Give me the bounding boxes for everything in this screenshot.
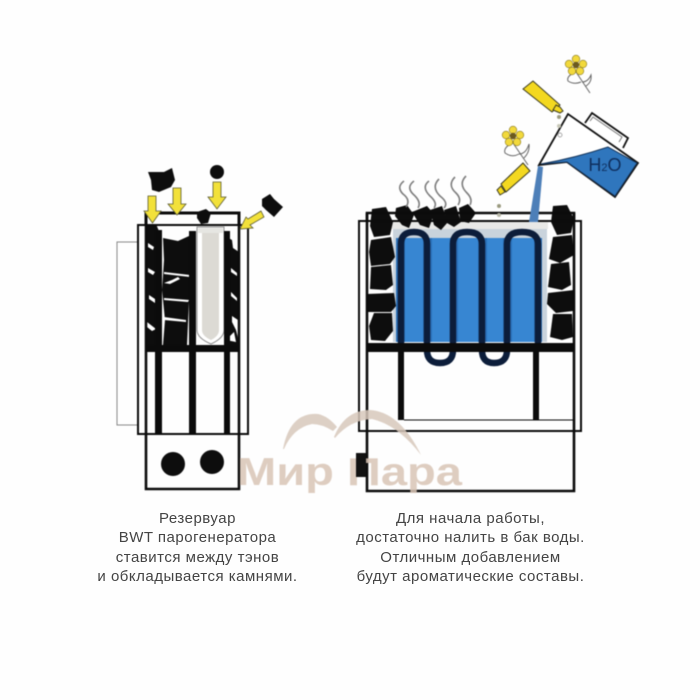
steam	[400, 176, 471, 208]
watermark: Мир Пара: Мир Пара	[237, 451, 462, 494]
water stream	[529, 166, 543, 222]
right heater side tab	[356, 453, 366, 477]
yellow arrows	[144, 182, 264, 229]
left heater posts and bar	[146, 230, 239, 434]
left heater grey side panel	[117, 242, 137, 425]
right heater housing	[359, 213, 581, 491]
kettle handle	[585, 113, 628, 148]
water tank	[390, 222, 548, 342]
left heater rocks	[147, 224, 239, 345]
right heater bar and posts	[367, 343, 574, 420]
right heater rocks	[367, 204, 574, 341]
lower flower	[502, 126, 529, 165]
heating coil	[401, 232, 538, 363]
lower aroma bottle	[497, 163, 530, 217]
watermark: Мир Пара	[237, 410, 462, 494]
kettle with water	[539, 113, 638, 197]
left heater: steam generator reservoir between heating elements	[117, 165, 283, 489]
left caption: BWT парогенератора	[119, 529, 276, 546]
left caption: и обкладывается камнями.	[97, 568, 298, 585]
right caption: Отличным добавлением	[380, 549, 561, 566]
left heater rock gaps	[147, 243, 238, 342]
right caption	[356, 510, 585, 585]
upper aroma bottle	[523, 81, 563, 137]
left caption: ставится между тэнов	[116, 549, 279, 566]
right caption: достаточно налить в бак воды.	[356, 529, 585, 546]
right heater: water tank with heating coil	[359, 176, 581, 491]
kettle water	[541, 147, 637, 196]
H2O label: H2O	[588, 155, 622, 175]
left heater reservoir tube	[197, 227, 224, 344]
left heater control knobs	[161, 450, 224, 476]
upper flower	[565, 55, 591, 93]
left heater housing	[138, 213, 248, 489]
left caption: Резервуар	[159, 510, 236, 527]
right caption: Для начала работы,	[396, 510, 545, 527]
kettle body	[539, 114, 638, 197]
right caption: будут ароматические составы.	[357, 568, 584, 585]
falling rocks	[148, 165, 283, 224]
left caption	[97, 510, 298, 585]
